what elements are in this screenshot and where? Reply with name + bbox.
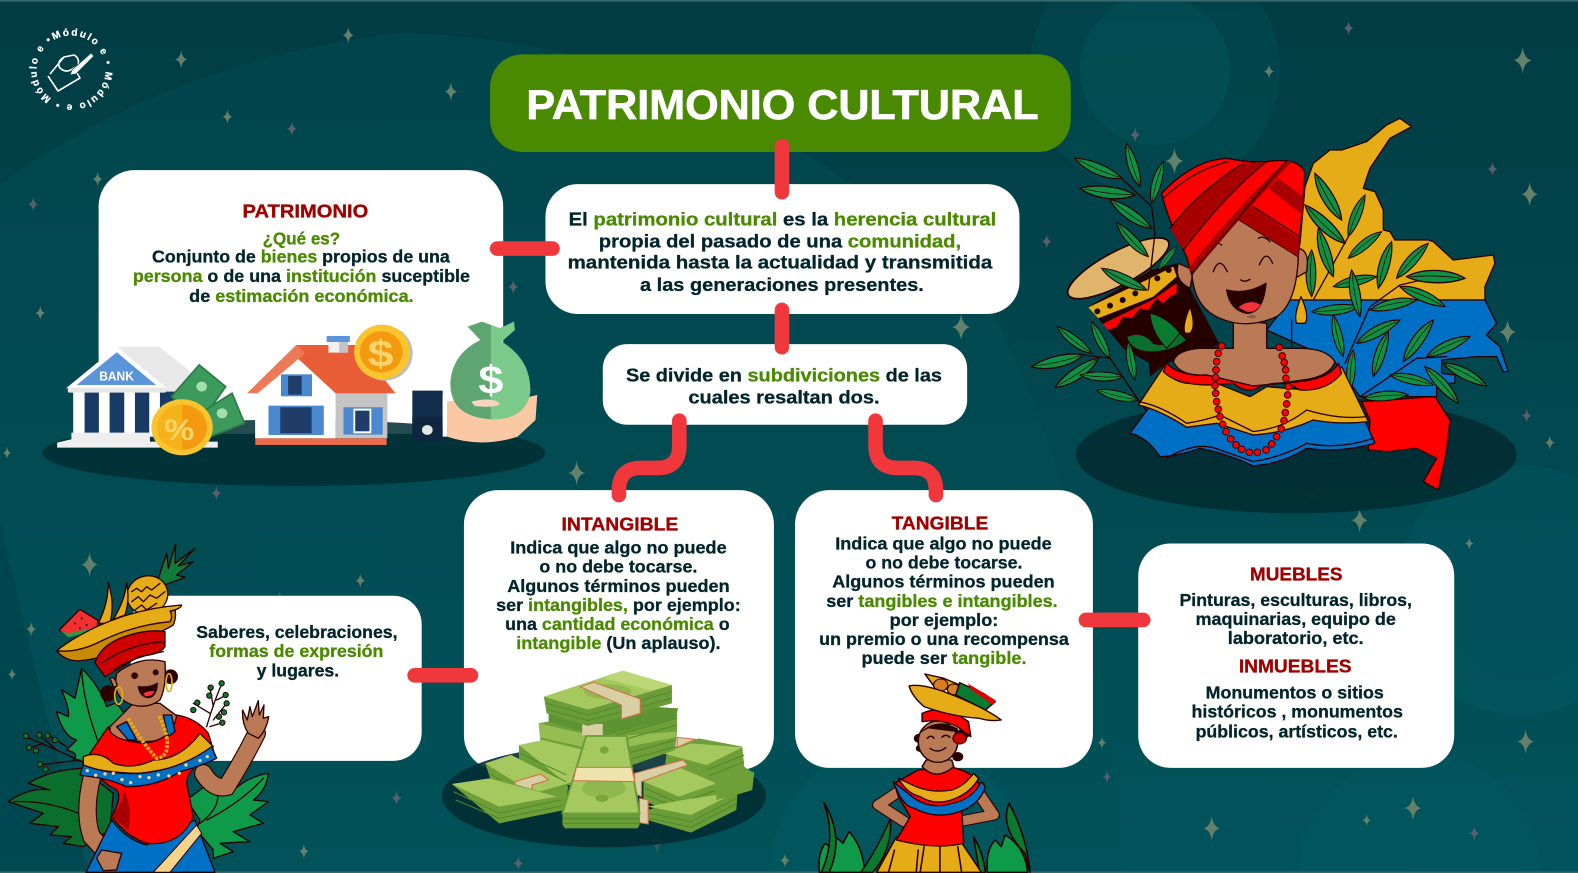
title: PATRIMONIO CULTURAL (526, 82, 1039, 128)
stack: right front (634, 760, 754, 833)
panel: tangible: o no debe tocarse. (865, 553, 1022, 573)
icon: percent coin: % (164, 413, 194, 447)
panel: muebles e inmuebles: Monumentos o sitios (1206, 682, 1384, 702)
panel: subdivisions (603, 344, 967, 425)
panel: muebles e inmuebles: históricos , monumentos (1192, 702, 1403, 722)
shadow under money (442, 745, 766, 847)
stack: middle upper (539, 705, 678, 767)
panel: tangible: Indica que algo no puede (835, 533, 1052, 553)
map of colombia (1267, 118, 1508, 490)
panel: saberes: formas de expresión (209, 641, 383, 661)
panel: intangible: o no debe tocarse. (539, 557, 697, 577)
panel: saberes (131, 596, 422, 761)
panel: tangible: por ejemplo: (890, 610, 998, 630)
shadow under colombian woman (1076, 397, 1517, 513)
illustration: pile of money (452, 671, 754, 833)
panel: muebles e inmuebles (1138, 543, 1454, 768)
stack: right back (663, 737, 754, 802)
woman head (1162, 158, 1307, 333)
icon: drum (1060, 227, 1220, 363)
woman figure (877, 674, 1001, 872)
icon: money bag in hand: $ (478, 357, 503, 402)
icon: monstera leaves (8, 668, 268, 858)
panel: patrimonio cultural definition: El patrimonio cultural es la herencia cultural (569, 208, 996, 229)
panel: intangible: ser intangibles, por ejemplo: (496, 595, 741, 615)
panel: patrimonio: Conjunto de bienes propios de una (152, 247, 450, 267)
stack: top (544, 671, 672, 726)
panel: subdivisions: Se divide en subdiviciones de las (626, 364, 942, 385)
icon: plants (819, 802, 1030, 872)
panel: intangible: intangible (Un aplauso). (516, 633, 721, 653)
necklace (1212, 343, 1292, 456)
panel: subdivisions: cuales resaltan dos. (688, 387, 880, 408)
stack: left middle (485, 740, 584, 810)
logo: Módulo e: Módulo e • Módulo e • Módulo e • (29, 28, 113, 110)
panel: patrimonio cultural definition: mantenida hasta la actualidad y transmitida (568, 252, 993, 273)
title (490, 54, 1071, 152)
icon: leaves right (1292, 171, 1489, 406)
icon: leaves left (1031, 142, 1220, 420)
icon: dollar coin (354, 325, 413, 381)
connector lines (415, 146, 1143, 675)
panel: saberes: Saberes, celebraciones, (196, 622, 398, 642)
panel: intangible: INTANGIBLE (562, 514, 678, 535)
panel: saberes: y lugares. (257, 660, 339, 680)
illustration: woman with fruit basket (8, 544, 269, 872)
woman figure (80, 631, 269, 872)
icon: bank: BANK (99, 369, 134, 384)
icon: bank (57, 347, 218, 448)
icon: fruit on basket (57, 544, 195, 661)
panel: tangible: ser tangibles e intangibles. (826, 591, 1058, 611)
panel: intangible: Algunos términos pueden (507, 576, 730, 596)
panel: patrimonio cultural definition: propia del pasado de una comunidad, (599, 231, 961, 252)
stack: left front (452, 778, 564, 823)
woman bust (1130, 320, 1375, 466)
icon: percent coin (151, 399, 213, 455)
panel: patrimonio cultural definition: a las generaciones presentes. (640, 274, 924, 295)
panel: muebles e inmuebles: MUEBLES (1250, 565, 1343, 586)
panel: patrimonio: PATRIMONIO (243, 201, 368, 222)
panel: tangible: un premio o una recompensa (819, 629, 1069, 649)
icon: house (247, 336, 396, 445)
panel: muebles e inmuebles: INMUEBLES (1239, 656, 1352, 677)
panel: muebles e inmuebles: Pinturas, esculturas, libros, (1179, 590, 1412, 610)
panel: patrimonio: de estimación económica. (189, 286, 414, 306)
panel: intangible: Indica que algo no puede (510, 538, 727, 558)
illustration: woman with colombia map and drum (1031, 118, 1508, 490)
panel: muebles e inmuebles: laboratorio, etc. (1228, 628, 1364, 648)
panel: intangible (464, 490, 774, 770)
panel: patrimonio: persona o de una institución suceptible (133, 266, 470, 286)
icon: dollar coin: $ (368, 334, 393, 375)
panel: muebles e inmuebles: públicos, artísticos, etc. (1196, 722, 1398, 742)
panel: tangible: Algunos términos pueden (832, 572, 1055, 592)
panel: patrimonio cultural definition (545, 184, 1019, 314)
icon: banknotes (171, 365, 245, 437)
panel: tangible (795, 490, 1093, 768)
panel: tangible: puede ser tangible. (861, 648, 1027, 668)
panel: patrimonio: ¿Qué es? (263, 229, 340, 249)
panel: muebles e inmuebles: maquinarias, equipo de (1196, 609, 1396, 629)
illustration: woman with basket and plants (819, 674, 1030, 872)
icon: money bag in hand (412, 322, 537, 442)
panel: intangible: una cantidad económica o (505, 614, 730, 634)
panel: patrimonio (99, 170, 503, 434)
shadow under patrimony icons (42, 420, 545, 486)
stack: centre upright (562, 736, 640, 828)
icon: berry branches (23, 681, 229, 772)
panel: tangible: TANGIBLE (892, 513, 988, 534)
illustration: bank, house, coins and money bag (57, 322, 537, 455)
